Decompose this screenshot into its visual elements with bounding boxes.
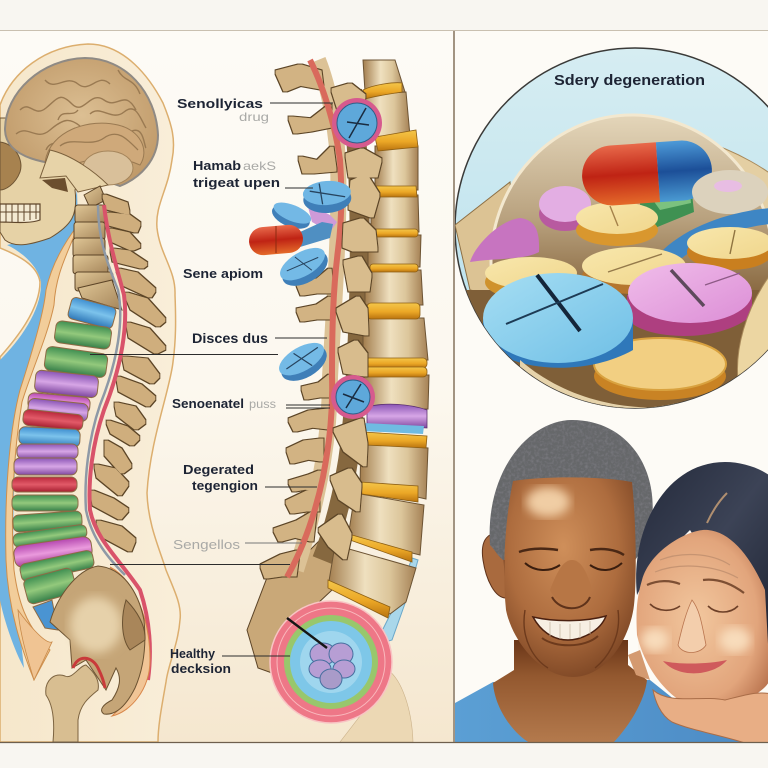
teeth [0,204,40,222]
woman [628,462,768,743]
woman nose [678,600,706,652]
red and blue capsule [580,139,714,207]
blue tablet three [275,241,334,293]
bottom rim tissue [520,360,690,420]
lower muscle fan [18,610,52,680]
cheek highlight left [641,628,669,652]
skull base [40,150,108,192]
orange discs [328,83,427,618]
pink speck [714,180,742,192]
circle sky [455,48,768,408]
hair [636,462,768,650]
label: puss: puss [249,397,276,411]
label: Degerated: Degerated [183,462,254,477]
vertebral bodies [328,60,429,614]
label: drug: drug [239,110,269,124]
mouth [533,616,606,640]
target disc cross-section [270,601,392,723]
label: Senolyticas: Senollyicas [177,96,263,111]
label: trigeat upen: trigeat upen [193,175,280,190]
forehead wrinkles [655,555,738,578]
purple tissue [308,208,337,230]
cheek highlight right [719,627,751,653]
tooth dividers [0,204,40,222]
purple wedge left [470,218,539,262]
iliac folds [123,600,145,650]
cheek folds [524,610,619,668]
blue tablet behind capsule [300,222,333,247]
spinal cord [90,205,150,680]
intervertebral discs [12,296,117,630]
label: Healthy: Healthy [170,646,216,661]
blue tablet four [274,336,333,388]
lower blue disc [362,423,424,434]
right lattice tissue [700,140,768,260]
pink tablet [627,263,752,336]
blue tablet two [269,198,314,234]
man closed eyes [525,563,622,570]
panel: smiling couple [455,420,768,743]
yellow tablet bottom [594,338,726,400]
blue tablet with cross [483,273,633,368]
yellow tablet middle [582,247,686,294]
spinal cord red [287,60,341,577]
woman lips [663,660,727,673]
articular processes [320,85,380,558]
cerebellum [83,151,133,185]
tan backing behind cord [296,60,338,570]
man [455,420,745,743]
blue tablet one [302,179,352,215]
shirt [455,680,745,743]
pelvis highlight [70,597,122,653]
right lower lattice tissue [737,275,768,380]
ear [482,534,506,598]
label: decksion: decksion [171,661,231,676]
woman closed eyes [650,604,738,612]
eye socket [0,142,21,190]
red joint arc [73,658,105,688]
parting [707,493,727,523]
front muscle strip [6,225,78,680]
forearm behind [628,650,650,680]
jaw opening [42,178,68,192]
lower tan bone [340,670,413,742]
yellow tablet back [576,202,658,246]
green tablet [640,193,694,228]
purple tablet back [539,186,591,231]
yellow tablet right [687,227,768,270]
hair [490,420,653,560]
pill in ring lower [331,375,375,419]
transverse processes [262,66,335,577]
spinal cord sheath [86,205,125,575]
pelvis [50,566,145,714]
red capsule [248,224,304,256]
hand [653,690,768,743]
label: Sene apiom: Sene apiom [183,266,263,281]
nose shadow [552,597,590,608]
man eyebrows [519,549,624,555]
label: tegengion: tegengion [192,478,258,493]
label: Hamab: Hamab [193,158,241,173]
panel: full body anatomy [0,44,180,742]
sacrum [246,540,332,673]
spine panel backdrop [0,31,453,742]
panel: spine side view [247,60,429,742]
lower lip [542,636,598,645]
bowl interior [491,115,768,409]
heading: Sdery degeneration: Sdery degeneration [554,72,705,89]
spinous processes [92,196,164,550]
woman brows [647,580,744,593]
blue ligament [382,558,419,642]
purple and blue disc [367,404,427,428]
pelvic wall tissue [110,567,150,716]
panel: pill close-up circle [455,48,768,420]
body silhouette [0,44,180,742]
pill in ring upper [332,98,382,148]
dark column behind articular processes [322,90,360,560]
face [637,530,768,708]
femur [46,665,98,742]
neck [493,640,647,743]
face [504,477,636,677]
nose [550,560,592,603]
callout lines [90,103,333,656]
skull [0,118,76,246]
forehead highlight [526,487,570,517]
brain [5,58,158,186]
lower brown base [465,290,768,420]
teeth lines [550,621,590,639]
pointer arrow into disc [287,618,327,648]
label: Sengellos: Sengellos [173,537,241,552]
yellow tablet left [485,257,577,300]
blue front tissue [0,190,78,668]
label: aekS: aekS [243,159,276,173]
pale pill right [692,170,768,214]
cervical vertebrae [73,186,122,310]
blue arc pill [663,208,768,258]
left lattice tissue [455,182,520,300]
label: Senoenatel: Senoenatel [172,396,244,411]
label: Disces dus: Disces dus [192,330,268,346]
